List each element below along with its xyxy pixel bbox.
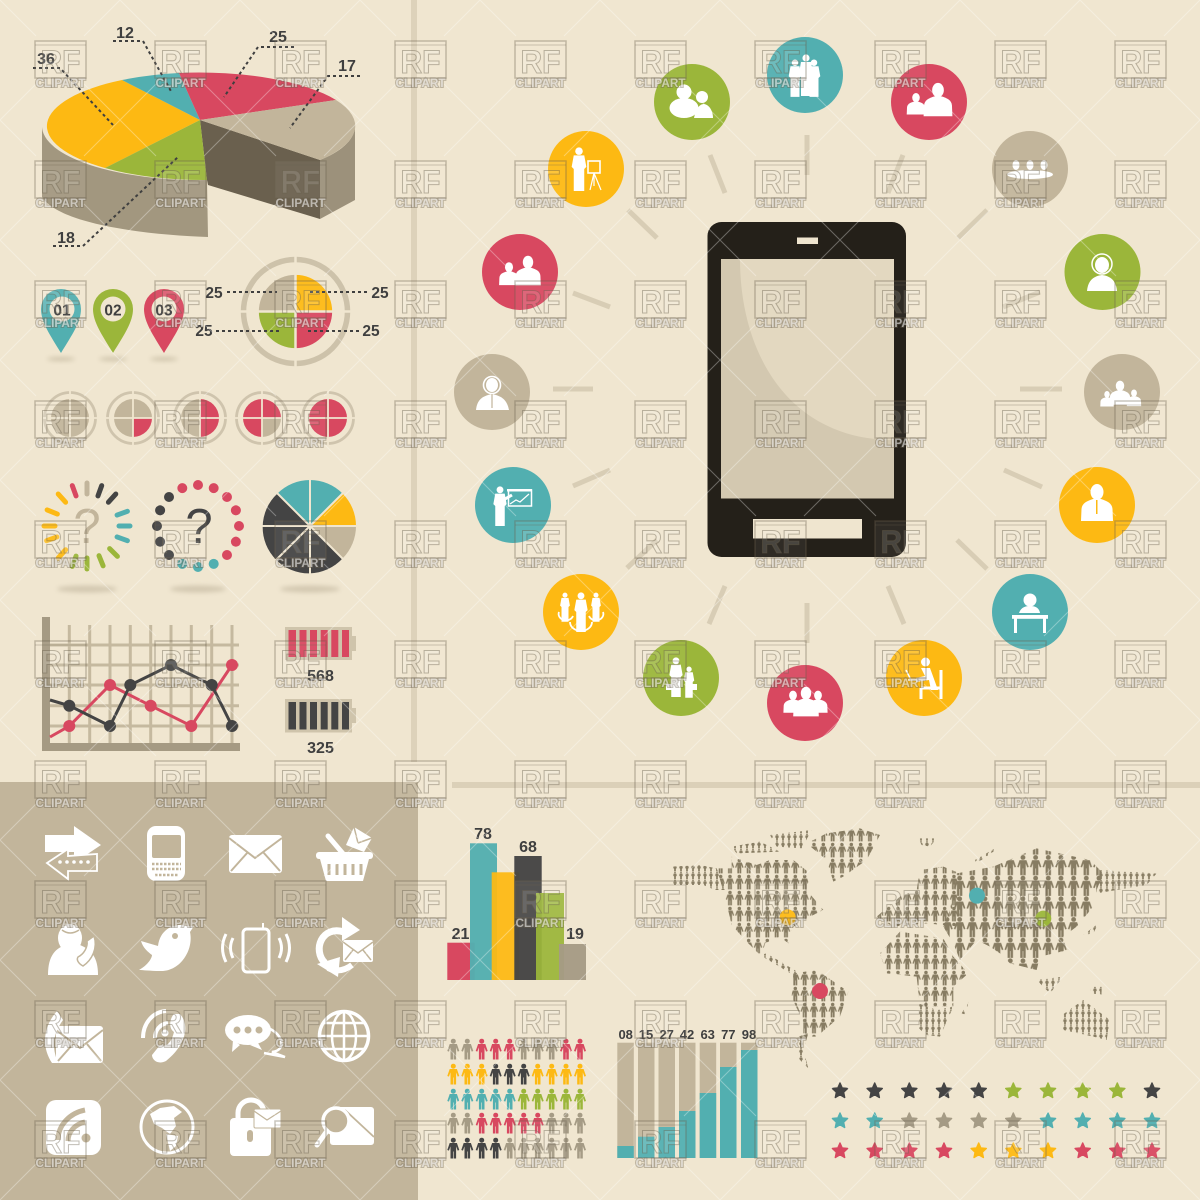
dial shadows: [57, 586, 340, 592]
overlapping bar chart: [447, 826, 586, 980]
column values: 27: [659, 1027, 674, 1042]
icon: basket with mail: [316, 827, 373, 881]
phone button: [753, 519, 862, 538]
phone speaker: [797, 238, 818, 244]
battery value: 568: [307, 668, 334, 685]
tick dial with question mark: [44, 483, 130, 569]
pin 01: 01: [53, 302, 71, 320]
icon: phone with waves: [143, 1011, 185, 1062]
icon: arrows: [45, 826, 101, 879]
vertical divider band: [411, 0, 417, 762]
line chart: [42, 617, 240, 751]
column values: 42: [680, 1027, 694, 1042]
map pins: [41, 289, 184, 361]
connector spokes: [553, 135, 1062, 643]
bar value: 21: [452, 926, 470, 943]
target label: 25: [362, 323, 380, 340]
icon: chat bubbles: [225, 1015, 285, 1057]
circle: business people with cases: [643, 640, 719, 716]
column values: 63: [700, 1027, 715, 1042]
pin 03: 03: [155, 302, 173, 320]
pie label 18: 18: [57, 230, 75, 247]
pie label 36: 36: [37, 51, 55, 68]
circle: meeting table: [992, 131, 1068, 207]
circle: person at desk: [992, 574, 1068, 650]
dot dial with question mark: ?: [185, 500, 213, 554]
circle: three standing people: [767, 37, 843, 113]
ring 2 of 4: [172, 390, 228, 446]
bar value: 19: [566, 926, 584, 943]
ring 0 of 4: [42, 390, 98, 446]
icon: globe: [320, 1011, 368, 1061]
icon: vibrating phone: [222, 923, 290, 972]
people pictogram grid: [447, 1039, 586, 1158]
ring 1 of 4: [105, 390, 161, 446]
panel: icon grid: [0, 782, 418, 1200]
circle: presenter with chart: [475, 467, 551, 543]
icon: call agent: [48, 924, 98, 975]
pie label 25: 25: [269, 29, 287, 46]
circle: two businessmen: [482, 234, 558, 310]
pin 02: 02: [104, 302, 122, 320]
target label: 25: [371, 285, 389, 302]
icon: bird: [139, 925, 194, 971]
circle: support operator: [1064, 234, 1140, 310]
target label: 25: [195, 323, 213, 340]
dot dial with question mark: [152, 480, 244, 572]
circle: man and woman: [891, 64, 967, 140]
icon: earth: [141, 1101, 193, 1153]
column values: [618, 1027, 756, 1042]
battery value: 325: [307, 740, 334, 757]
bar value: 68: [519, 839, 537, 856]
horizontal divider band: [452, 782, 1200, 788]
circle: person with tie: [454, 354, 530, 430]
circle: presenter at easel: [548, 131, 624, 207]
circle: group of three: [767, 665, 843, 741]
icon: smartphone keypad: [147, 826, 185, 881]
icon: lock and mail: [230, 1100, 281, 1156]
progress column chart: [617, 1027, 758, 1158]
circle: family group: [1084, 354, 1160, 430]
icon: rss tile: [46, 1100, 101, 1155]
world map of people: [672, 828, 1157, 1068]
target quarter chart: [195, 255, 389, 368]
pie label 17: 17: [338, 58, 356, 75]
star rating rows: [832, 1083, 1160, 1158]
circle: person with laptop: [886, 640, 962, 716]
map marker green: [1035, 911, 1051, 927]
map marker teal: [969, 888, 985, 904]
pie label 12: 12: [116, 25, 134, 42]
map marker red: [812, 983, 828, 999]
circle: team on rings: [543, 574, 619, 650]
column values: 77: [721, 1027, 736, 1042]
icon: refresh mail: [317, 917, 373, 977]
phone screen: [721, 259, 894, 498]
bar value: 78: [474, 826, 492, 843]
icon: envelope: [229, 835, 282, 873]
icon: search mail: [317, 1107, 374, 1145]
target label: 25: [205, 285, 223, 302]
column values: 15: [639, 1027, 653, 1042]
circle: two people: [654, 64, 730, 140]
3D pie chart: [33, 25, 360, 247]
tick dial with question mark: ?: [73, 500, 101, 554]
battery dark: [285, 699, 356, 757]
pin 01: [41, 289, 81, 353]
row of progress rings: [42, 390, 356, 446]
column values: 08: [618, 1027, 633, 1042]
pin 03: [144, 289, 184, 353]
ring 4 of 4: [300, 390, 356, 446]
battery red: [285, 627, 356, 685]
pin 02: [93, 289, 133, 353]
column values: 98: [742, 1027, 756, 1042]
circle: businessman: [1059, 467, 1135, 543]
ring 3 of 4: [234, 390, 290, 446]
map marker yellow: [780, 909, 796, 925]
smartphone: [708, 222, 906, 557]
icon: signal and mail: [45, 1011, 103, 1063]
segmented pie chart: [262, 478, 358, 574]
